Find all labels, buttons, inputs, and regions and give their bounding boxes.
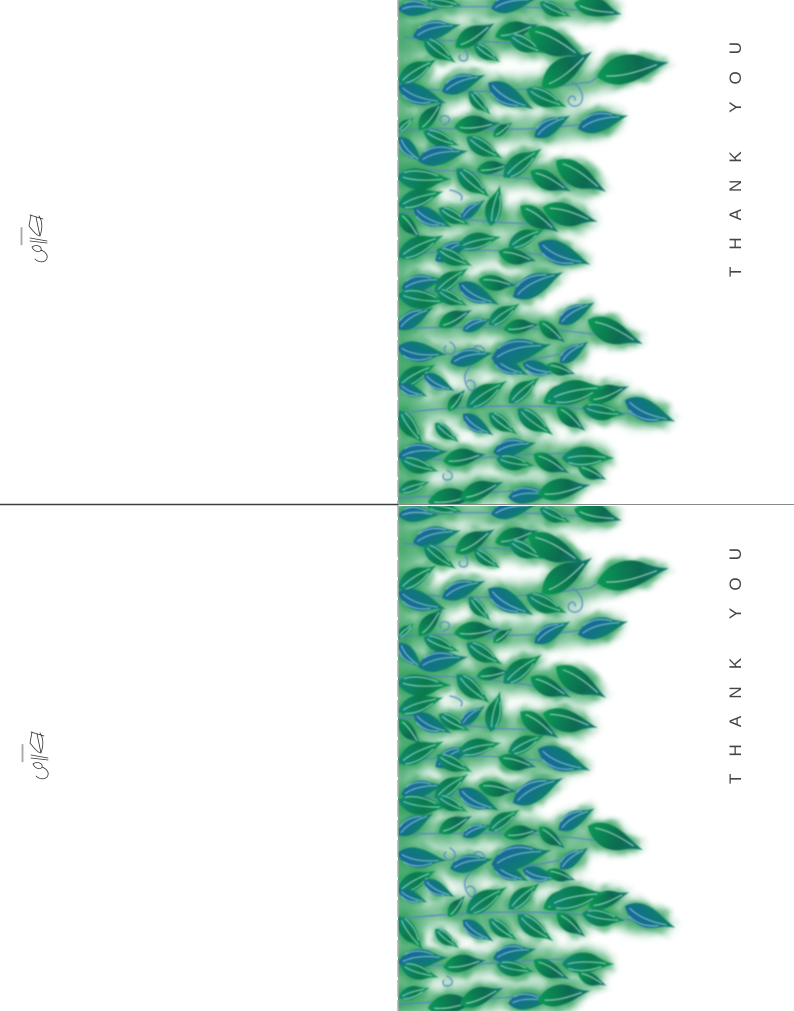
row 7 leaves [393, 221, 594, 276]
row 13 leaves [397, 433, 615, 486]
signature mark bottom [22, 732, 48, 779]
cut line right [398, 504, 794, 506]
left green wash [396, 0, 430, 506]
row 6 leaves [393, 181, 600, 244]
row 8 leaves [396, 261, 568, 313]
thank you text top: THANK YOU [726, 42, 745, 277]
cut line left [0, 504, 398, 506]
panel: bottom leaf art [392, 495, 679, 1011]
row 14 leaves [397, 473, 592, 511]
row 4 leaves [394, 96, 631, 166]
row 1 leaves [398, 0, 624, 24]
leaf garland [392, 0, 679, 511]
thank you text bottom: THANK YOU [726, 548, 745, 784]
row 3 leaves [393, 41, 671, 120]
stems and curls [398, 6, 668, 498]
signature mark top [22, 215, 47, 262]
panel: top leaf art [392, 0, 679, 511]
row 12 leaves [392, 400, 627, 449]
row 5 leaves [393, 133, 612, 205]
row 11 leaves [393, 356, 679, 433]
fold line vertical [397, 0, 399, 1011]
row 2 leaves [410, 14, 590, 70]
row 9 leaves [393, 295, 647, 356]
row 10 leaves [395, 331, 592, 383]
soft green bands behind leaves [398, 5, 650, 498]
